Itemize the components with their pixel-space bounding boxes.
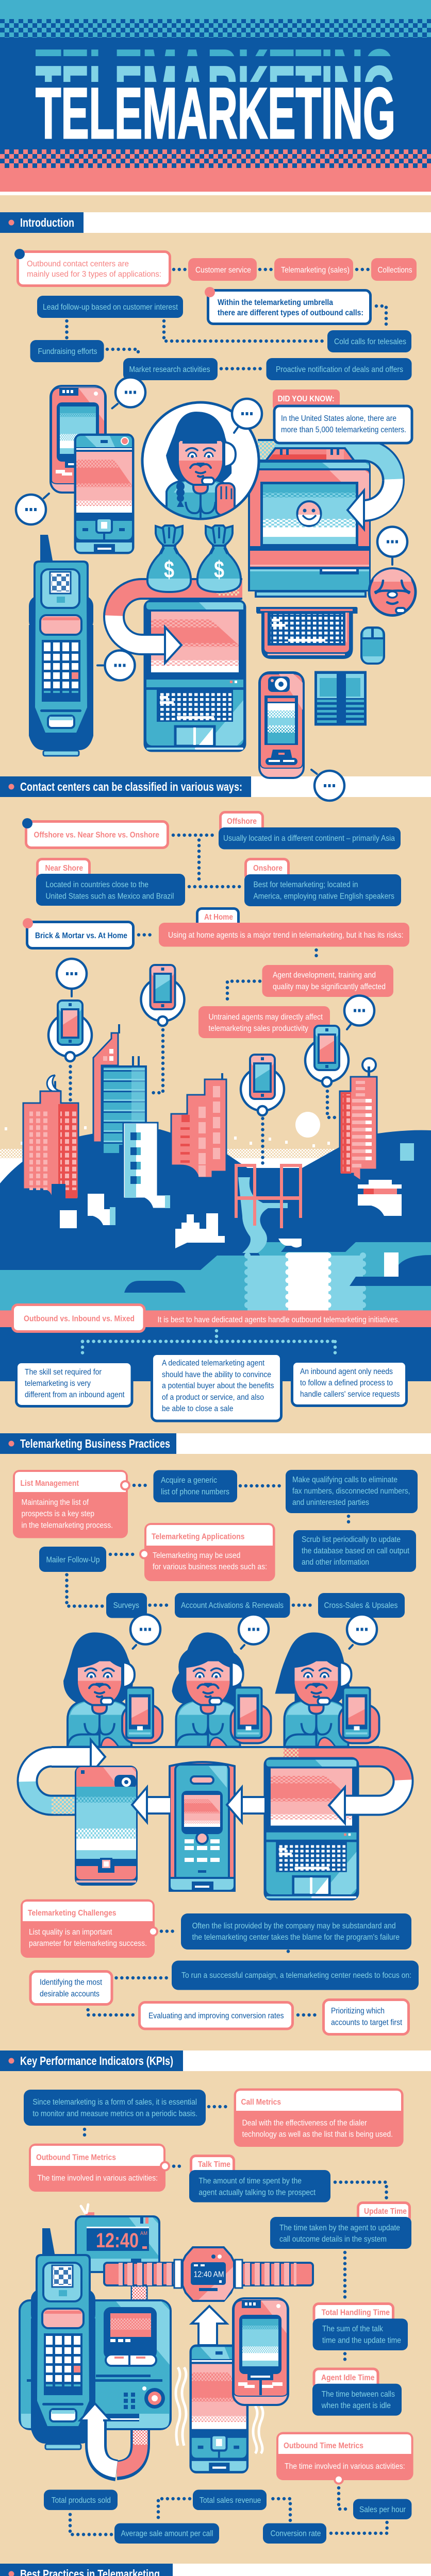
panel: call metrics [234, 2089, 404, 2147]
callout: offshore vs near shore vs onshore [22, 818, 168, 848]
illustration: dither straps [117, 2286, 147, 2470]
box: surveys: Surveys [113, 1601, 139, 1610]
panel: telemarketing applications: Telemarketing may be used [153, 1551, 240, 1560]
panel: call metrics: Deal with the effectiveness of the dialer [242, 2119, 367, 2128]
panel: near shore: Near Shore [45, 864, 83, 873]
box: proactive notification [266, 358, 411, 380]
callout: did you know [273, 389, 412, 443]
box: skill set: different from an inbound agent [25, 1391, 125, 1399]
panel: agent idle time: when the agent is idle [321, 2401, 391, 2410]
icon: building 1 [23, 1075, 79, 1198]
panel: outbound time metrics right [276, 2432, 413, 2484]
box: dedicated agent: of a product or service, and also [162, 1393, 264, 1402]
panel: call metrics: Call Metrics [241, 2098, 281, 2107]
box: agent development: quality may be significantly affected [273, 982, 386, 991]
box: total sales revenue [193, 2489, 267, 2510]
box: inbound agent [292, 1361, 406, 1405]
box: scrub list: and other information [302, 1558, 369, 1567]
panel: outbound time metrics right: Outbound Time Metrics [284, 2442, 363, 2450]
box: average sale [114, 2523, 219, 2544]
box: agent development [262, 965, 393, 997]
box: account activations [175, 1593, 290, 1618]
icon: face close-up [369, 569, 416, 615]
arrow: white up loop [80, 2403, 117, 2470]
box: acquire list [154, 1470, 237, 1502]
icon: wristwatch [104, 2247, 313, 2301]
box: scrub list: Scrub list periodically to update [302, 1535, 401, 1544]
panel: agent idle time [312, 2369, 402, 2416]
panel: list management [13, 1470, 129, 1538]
callout: outbound applications: mainly used for 3 types of applications: [27, 270, 161, 279]
section bars: Telemarketing Business Practices [20, 1437, 170, 1450]
icon: building 4 [171, 1073, 226, 1178]
box: successful campaign: To run a successful campaign, a telemarketing center needs to focus on: [181, 1971, 411, 1980]
connector dots: introduction [67, 269, 386, 369]
box: list substandard [181, 1913, 411, 1950]
box: total sales revenue: Total sales revenue [200, 2496, 261, 2505]
icon: brick phone 2 [31, 2228, 95, 2449]
panel: talk time [189, 2156, 330, 2202]
box: since telemarketing [24, 2090, 206, 2126]
icon: building 2 [93, 1024, 147, 1153]
icon: laptop 2 [264, 1758, 358, 1900]
callout: brick and mortar vs at home: Brick & Mortar vs. At Home [35, 931, 127, 940]
panel: list management: in the telemarketing process. [22, 1521, 113, 1530]
pill: customer service: Customer service [195, 266, 251, 275]
section bars: Key Performance Indicators (KPIs) [20, 2054, 173, 2067]
icon: candybar phone [170, 1762, 235, 1891]
location pins with phones [48, 959, 374, 1167]
panel: total handling time: The sum of the talk [322, 2325, 383, 2333]
box: qualifying calls: Make qualifying calls to eliminate [292, 1476, 397, 1484]
panel: agent idle time: Agent Idle Time [321, 2374, 375, 2382]
icon: mouse [361, 628, 384, 664]
box: qualifying calls: and uninterested parties [292, 1498, 369, 1507]
box: sales per hour [353, 2499, 411, 2519]
vibration waves [176, 2367, 263, 2453]
icon: brochure [314, 671, 367, 725]
box: mailer follow-up [39, 1547, 106, 1572]
panel: outbound time metrics left: Outbound Time Metrics [36, 2153, 116, 2162]
title echoes [36, 48, 393, 82]
box: dedicated agent: A dedicated telemarketing agent [162, 1359, 265, 1368]
panel: total handling time [313, 2304, 408, 2350]
icon: flip phone 2 [233, 2298, 288, 2405]
panel: outbound vs inbound vs mixed [0, 1304, 431, 1421]
box: untrained agents: telemarketing sales productivity [208, 1024, 308, 1033]
panel: at home: Using at home agents is a major trend in telemarketing, but it has its risks: [168, 931, 403, 940]
icon: pager clock: 12:40 [96, 2229, 139, 2252]
box: identifying accounts: Identifying the most [40, 1978, 103, 1987]
box: sales per hour: Sales per hour [359, 2505, 406, 2514]
illustration: city skyline [0, 1112, 431, 1311]
box: qualifying calls: fax numbers, disconnected numbers, [292, 1487, 410, 1496]
box: dedicated agent [152, 1354, 281, 1421]
panel: telemarketing challenges: Telemarketing Challenges [28, 1909, 117, 1918]
box: dedicated agent: a potential buyer about the benefits [162, 1382, 274, 1391]
box: skill set [16, 1362, 132, 1406]
box: successful campaign [172, 1961, 419, 1990]
illustration: CRT monitor [248, 448, 371, 597]
icon: brick phone [29, 535, 93, 756]
panel: onshore: Best for telemarketing; located in [254, 880, 358, 889]
panel: outbound time metrics left [29, 2144, 169, 2192]
box: list substandard: the telemarketing center takes the blame for the program's failure [192, 1933, 400, 1942]
callout: did you know: more than 5,000 telemarketing centers. [281, 426, 406, 434]
panel: telemarketing challenges: parameter for telemarketing success. [29, 1939, 147, 1948]
box: total products sold [44, 2489, 118, 2510]
contact center classification [139, 835, 317, 1002]
header banner [0, 0, 431, 212]
panel: near shore [36, 859, 185, 906]
pill: collections: Collections [377, 266, 412, 275]
panel: onshore [244, 859, 401, 906]
worker 1 [63, 1632, 162, 1747]
pill: collections [371, 258, 417, 281]
panel: at home [159, 909, 409, 947]
panel: offshore [219, 812, 401, 849]
icon: wristwatch: 12:40 AM [194, 2270, 224, 2279]
panel: outbound vs inbound vs mixed: Outbound vs. Inbound vs. Mixed [24, 1315, 135, 1324]
speech bubble over contact bar [314, 771, 344, 801]
callout: telemarketing umbrella: there are different types of outbound calls: [218, 309, 363, 317]
panel: offshore: Usually located in a different continent – primarily Asia [223, 834, 395, 843]
illustration: loop ribbon [27, 1740, 403, 1814]
challenges connectors [88, 1931, 319, 2015]
box: identifying accounts [30, 1971, 112, 2004]
pill: telemarketing sales: Telemarketing (sales) [281, 266, 350, 275]
box: conversion rate [263, 2523, 326, 2544]
box: fundraising: Fundraising efforts [38, 347, 97, 356]
panel: offshore: Offshore [227, 817, 257, 826]
box: untrained agents [198, 1006, 330, 1038]
speech bubbles [16, 377, 407, 774]
arrow: white up [192, 2306, 227, 2345]
panel: update time: Update Time [364, 2207, 407, 2216]
panel: talk time: The amount of time spent by the [198, 2177, 302, 2185]
box: evaluating conversion: Evaluating and improving conversion rates [148, 2012, 284, 2021]
panel: outbound time metrics right: The time involved in various activities: [285, 2462, 405, 2471]
box: total products sold: Total products sold [52, 2496, 111, 2505]
panel: telemarketing challenges [21, 1899, 157, 1958]
icon: phone vibrating [190, 2345, 248, 2472]
panel: list management: Maintaining the list of [22, 1498, 89, 1507]
worker 2 [172, 1632, 271, 1747]
box: average sale: Average sale amount per call [121, 2530, 213, 2538]
box: acquire list: list of phone numbers [161, 1488, 229, 1497]
box: dedicated agent: should have the ability to convince [162, 1370, 271, 1379]
callout: brick and mortar vs at home [23, 918, 133, 948]
panel: telemarketing applications: Telemarketing Applications [152, 1532, 244, 1541]
box: qualifying calls [286, 1470, 418, 1513]
box: scrub list [293, 1530, 416, 1572]
box: cold calls: Cold calls for telesales [334, 337, 406, 346]
box: lead follow-up [37, 296, 183, 318]
callout: offshore vs near shore vs onshore: Offshore vs. Near Shore vs. Onshore [34, 831, 159, 840]
callout: telemarketing umbrella: Within the telemarketing umbrella [218, 298, 333, 307]
panel: agent idle time: The time between calls [322, 2390, 395, 2399]
callout: outbound applications: Outbound contact centers are [27, 260, 129, 268]
icon: camera phone large [75, 1766, 138, 1886]
box: market research: Market research activities [129, 365, 210, 374]
icon: agent with braid [142, 402, 259, 520]
icon: bridge [235, 1164, 302, 1228]
box: cross-sales [318, 1593, 405, 1618]
speech bubble on ribbon [105, 650, 135, 680]
box: lead follow-up: Lead follow-up based on customer interest [43, 303, 178, 312]
icon: building 3 [123, 1123, 171, 1209]
arrow: white return into monitor [347, 479, 394, 529]
panel: telemarketing challenges: List quality is an important [29, 1928, 112, 1937]
panel: update time: call outcome details in the system [279, 2235, 387, 2244]
panel: talk time: agent actually talking to the prospect [198, 2189, 316, 2197]
box: agent development: Agent development, training and [273, 971, 376, 980]
box: conversion rate: Conversion rate [270, 2530, 321, 2538]
panel: onshore: America, employing native English speakers [254, 892, 394, 901]
illustration: front phone [75, 434, 134, 553]
box: scrub list: the database based on call output [302, 1547, 410, 1555]
box: list substandard: Often the list provided by the company may be substandard and [192, 1922, 396, 1930]
panel: telemarketing applications: for various business needs such as: [153, 1563, 267, 1571]
icon: building 5 [340, 1058, 377, 1181]
callout: did you know: In the United States alone, there are [281, 414, 396, 423]
box: prioritizing [324, 2000, 408, 2034]
box: account activations: Account Activations & Renewals [181, 1601, 284, 1610]
box: cold calls [327, 330, 411, 352]
box: inbound agent: to follow a defined process to [300, 1379, 393, 1387]
icon: pager clock [76, 2205, 159, 2272]
box: inbound agent: handle callers' service requests [300, 1390, 400, 1399]
business practices connectors [67, 1485, 349, 1606]
box: proactive notification: Proactive notification of deals and offers [276, 365, 403, 374]
panel: total handling time: Total Handling Time [322, 2308, 390, 2317]
panel: near shore: Located in countries close to the [45, 880, 148, 889]
box: identifying accounts: desirable accounts [40, 1990, 100, 1998]
section bars: Contact centers can be classified in various ways: [20, 780, 242, 793]
illustration: flip phone [51, 386, 106, 493]
panel: call metrics: technology as well as the list that is being used. [242, 2130, 393, 2139]
callout: telemarketing umbrella [205, 287, 370, 324]
icon: pager clock: AM [140, 2231, 147, 2236]
panel: onshore: Onshore [253, 864, 283, 873]
icon: laptop [144, 600, 245, 751]
panel: total handling time: time and the update time [322, 2336, 401, 2345]
KPI connectors [70, 2107, 387, 2534]
panel: near shore: United States such as Mexico and Brazil [45, 892, 174, 901]
box: cross-sales: Cross-Sales & Upsales [324, 1601, 398, 1610]
section bars: Introduction [20, 216, 74, 229]
box: evaluating conversion [139, 2002, 293, 2029]
pill: telemarketing sales [274, 258, 353, 281]
panel: outbound vs inbound vs mixed: It is best to have dedicated agents handle outbound telemarketing initiatives. [158, 1316, 400, 1324]
box: since telemarketing: to monitor and measure metrics on a periodic basis. [32, 2109, 197, 2119]
icon: keyboard [256, 607, 357, 659]
callout: did you know: DID YOU KNOW: [278, 395, 335, 403]
box: surveys [106, 1593, 147, 1618]
arrow: white into laptop [114, 616, 181, 663]
icon: camera phone [259, 672, 304, 778]
box: acquire list: Acquire a generic [161, 1476, 217, 1485]
pill: customer service [188, 258, 257, 281]
box: skill set: telemarketing is very [25, 1379, 91, 1388]
panel: list management: List Management [21, 1479, 79, 1488]
box: market research [123, 358, 218, 380]
bubbles above workers [130, 1615, 377, 1649]
icon: answering machine [20, 2300, 171, 2429]
box: prioritizing: accounts to target first [331, 2019, 403, 2027]
box: fundraising [30, 340, 104, 362]
panel: talk time: Talk Time [198, 2160, 230, 2169]
panel: at home: At Home [204, 913, 233, 922]
box: since telemarketing: Since telemarketing is a form of sales, it is essential [32, 2098, 197, 2107]
panel: update time [270, 2203, 411, 2249]
box: inbound agent: An inbound agent only needs [300, 1367, 393, 1376]
arrows between devices [132, 1780, 403, 1823]
panel: update time: The time taken by the agent to update [279, 2224, 400, 2232]
illustration: ribbon arrows behind devices [114, 442, 394, 617]
panel: telemarketing applications [140, 1523, 275, 1581]
box: untrained agents: Untrained agents may directly affect [208, 1013, 323, 1022]
box: prioritizing: Prioritizing which [331, 2007, 385, 2015]
box: dedicated agent: be able to close a sale [162, 1404, 233, 1413]
worker 3 [275, 1632, 379, 1747]
panel: outbound time metrics left: The time involved in various activities: [37, 2174, 158, 2182]
icon: money bags [147, 526, 241, 592]
callout: outbound applications [14, 249, 170, 285]
box: mailer follow-up: Mailer Follow-Up [46, 1556, 100, 1564]
panel: list management: prospects is a key step [22, 1510, 94, 1518]
box: skill set: The skill set required for [25, 1368, 102, 1377]
